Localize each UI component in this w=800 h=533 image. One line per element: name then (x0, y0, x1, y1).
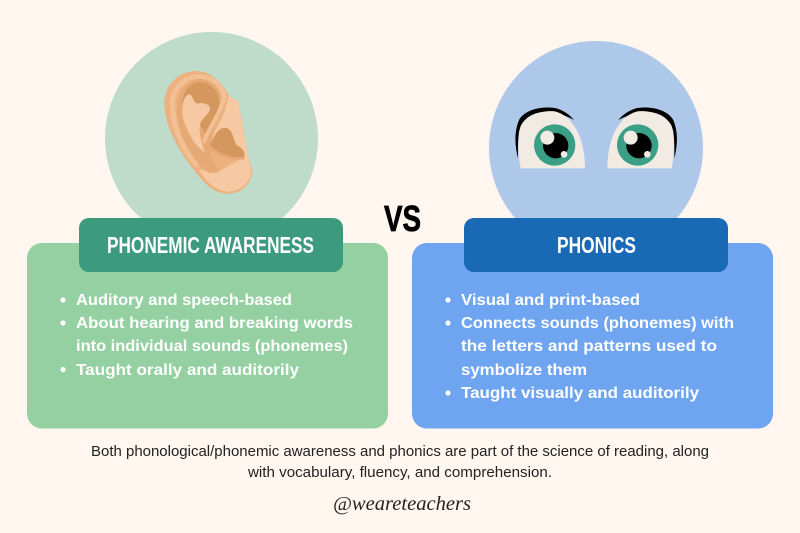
caption: Both phonological/phonemic awareness and phonics are part of the science of reading, along (91, 444, 709, 460)
bullet list: phonemic awareness: Auditory and speech-based (76, 292, 292, 309)
bullet list: phonics: Taught visually and auditorily (461, 385, 699, 402)
bullet list: phonemic awareness: About hearing and breaking words (76, 315, 353, 332)
heading: phonemic awareness (79, 218, 343, 272)
bullet list: phonics: the letters and patterns used to (461, 338, 717, 355)
icon: right eye (607, 107, 677, 168)
heading: phonics (464, 218, 728, 272)
social handle: @weareteachers (333, 493, 471, 515)
vs label: VS (384, 198, 421, 239)
panel: phonemic awareness (27, 243, 388, 428)
bullet list: phonics: symbolize them (461, 362, 587, 379)
circle: ear backdrop (105, 32, 318, 245)
caption (91, 444, 709, 481)
icon: left eye (515, 107, 585, 168)
bullet list: phonemic awareness: into individual sounds (phonemes) (76, 338, 348, 355)
icon: ear (164, 71, 252, 194)
heading: phonics: PHONICS (557, 232, 636, 258)
caption: with vocabulary, fluency, and comprehension. (247, 465, 552, 481)
bullet list: phonics: Visual and print-based (461, 292, 640, 309)
bullet list: phonics: Connects sounds (phonemes) with (461, 315, 734, 332)
circle: eyes backdrop (489, 41, 703, 255)
bullet list: phonics (445, 292, 734, 402)
heading: phonemic awareness: PHONEMIC AWARENESS (107, 232, 314, 258)
bullet list: phonemic awareness: Taught orally and auditorily (76, 362, 299, 379)
icon: eyes (515, 107, 677, 168)
bullet list: phonemic awareness (60, 292, 353, 379)
panel: phonics (412, 243, 773, 428)
